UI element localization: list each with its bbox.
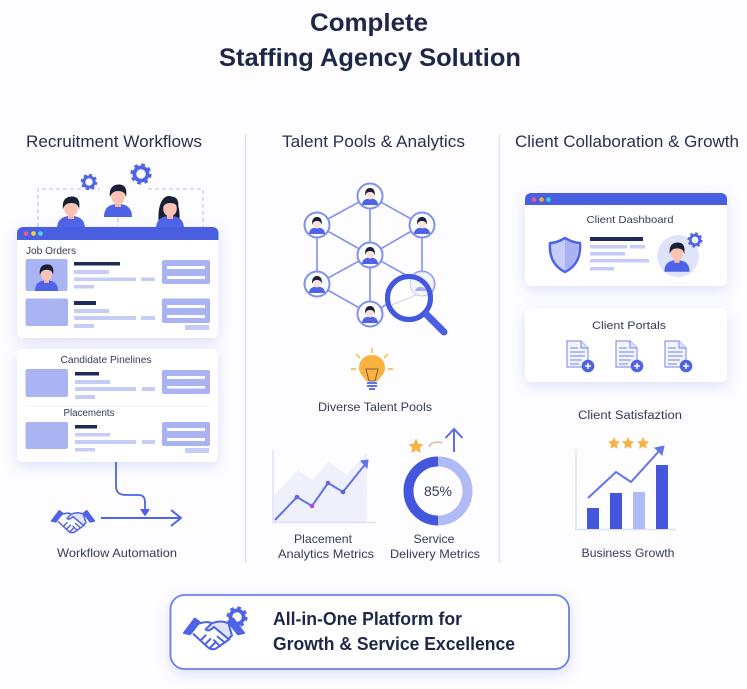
callout text — [273, 609, 515, 654]
icon: light bulb — [351, 348, 393, 389]
label: business growth: Business Growth — [582, 546, 674, 560]
heading: client collaboration and growth: Client Collaboration & Growth — [515, 132, 739, 151]
icon: client avatar — [657, 233, 702, 277]
label: service delivery metrics — [390, 532, 480, 561]
icon: handshake with gear — [184, 608, 246, 649]
panel: job orders: Job Orders — [26, 245, 76, 257]
title: Staffing Agency Solution — [219, 44, 521, 72]
label: diverse talent pools: Diverse Talent Pools — [318, 400, 432, 414]
callout text: All-in-One Platform for — [273, 609, 462, 629]
arrow: workflow connector — [101, 462, 181, 526]
heading: talent pools and analytics: Talent Pools & Analytics — [282, 132, 465, 151]
panel: client portals: Client Portals — [592, 320, 667, 332]
panel: candidate pipelines and placements — [17, 349, 218, 462]
icon: magnifying glass — [388, 272, 444, 332]
panel: client dashboard: Client Dashboard — [586, 214, 674, 226]
label: client satisfaction: Client Satisfaztion — [578, 410, 682, 422]
callout text: Growth & Service Excellence — [273, 634, 515, 654]
chart: service delivery donut — [408, 462, 468, 520]
panel: candidate pipelines and placements: Candidate Pinelines — [60, 354, 152, 366]
label: placement analytics metrics: Analytics Metrics — [278, 547, 374, 561]
heading: recruitment workflows: Recruitment Workflows — [26, 132, 202, 151]
icon: shield — [550, 238, 580, 272]
team illustration — [38, 165, 203, 229]
icon: star and up arrow — [408, 429, 462, 453]
chart: placement analytics — [273, 450, 376, 522]
title — [219, 9, 521, 72]
label: service delivery metrics: Service — [414, 532, 455, 546]
title: Complete — [310, 9, 428, 37]
panel: client dashboard — [525, 193, 727, 286]
panel: job orders — [17, 227, 218, 338]
label: placement analytics metrics: Placement — [294, 532, 353, 546]
callout: all-in-one platform — [170, 595, 569, 669]
chart: business growth — [576, 437, 676, 530]
panel: candidate pipelines and placements: Placements — [64, 407, 114, 419]
chart: service delivery donut: 85% — [424, 483, 452, 499]
label: placement analytics metrics — [278, 532, 374, 561]
label: workflow automation: Workflow Automation — [57, 546, 177, 560]
icon: handshake — [52, 511, 94, 533]
network diagram — [304, 184, 434, 326]
panel: client portals — [525, 308, 727, 382]
label: service delivery metrics: Delivery Metrics — [390, 547, 480, 561]
